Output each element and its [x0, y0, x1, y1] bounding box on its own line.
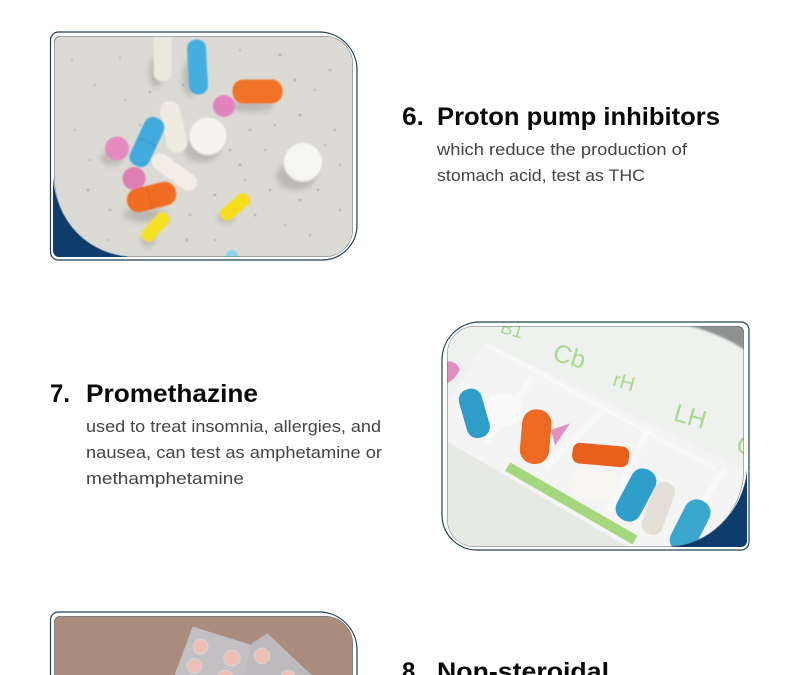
photo of pill organiser: Cb: [550, 339, 589, 375]
inner keyline: [447, 326, 744, 547]
photo of pill organiser: [447, 326, 744, 547]
panel: pill organiser photo: [441, 321, 750, 551]
photo frame outline: [442, 322, 749, 550]
lid ridge: [488, 346, 715, 469]
dark object corner: [686, 326, 744, 350]
white capsule lower: [151, 153, 198, 191]
tray: [450, 443, 638, 546]
shadows: [101, 56, 316, 247]
heading: item 7: Promethazine: [86, 380, 258, 408]
blue capsule top: [187, 39, 208, 95]
yellow capsules: [140, 211, 171, 243]
photo of pill organiser: C: [733, 431, 759, 462]
orange capsule upright: [519, 408, 553, 465]
inner keyline: [54, 616, 353, 675]
blue capsule center: [128, 116, 166, 168]
blister pills: [187, 639, 295, 675]
text block: item 7 description: used to treat insomnia, allergies, and: [86, 418, 381, 436]
green printed strip: [508, 467, 635, 540]
photo frame outline: [50, 32, 357, 260]
heading: item 6: Proton pump inhibitors: [437, 103, 720, 131]
pale band along the curve: [54, 177, 135, 257]
text block: item 6 description: [436, 141, 687, 185]
text block: item 7 description: [86, 418, 383, 488]
heading: item 7: 7.: [50, 380, 70, 408]
rear blister pack: [243, 633, 312, 675]
white round tablets: [191, 144, 217, 156]
text block: item 6 description: stomach acid, test as THC: [437, 167, 645, 185]
orange capsule lower: [126, 180, 178, 214]
text block: item 6 description: which reduce the production of: [436, 141, 687, 159]
inner keyline: [54, 36, 353, 257]
panel: blister pack photo: [40, 610, 370, 675]
blue capsule right: [670, 499, 710, 547]
mirrored lid numerals: B1: [498, 316, 526, 342]
white capsule center: [160, 101, 188, 153]
photo frame outline: [50, 612, 357, 675]
panel: pills on speckled surface photo: [50, 31, 360, 262]
text block: item 7 description: methamphetamine: [86, 470, 244, 488]
orange flat tablet: [572, 442, 630, 468]
partial blue pill at edge: [225, 249, 239, 256]
white capsule top: [154, 31, 172, 81]
heading: item 6: 6.: [402, 103, 424, 131]
cream capsule: [642, 482, 675, 535]
photo of blister packs: [54, 616, 353, 675]
text block: item 7 description: nausea, can test as amphetamine or: [86, 444, 383, 462]
photo of scattered pills: [50, 31, 360, 262]
pink pill wedge: [551, 423, 570, 446]
navy corner: [666, 470, 747, 547]
table surface: [448, 442, 626, 546]
pink pill left: [448, 361, 460, 383]
blue capsule centre: [616, 468, 656, 522]
blue capsule left: [458, 388, 490, 438]
navy corner: [53, 177, 136, 257]
front blister pack: [173, 627, 252, 675]
pink tablets: [213, 95, 235, 117]
photo of pill organiser: rH: [610, 368, 638, 396]
orange capsule: [232, 80, 282, 104]
photo of pill organiser: LH: [671, 399, 710, 435]
white tablet: [569, 466, 620, 501]
white pill behind: [485, 393, 522, 427]
